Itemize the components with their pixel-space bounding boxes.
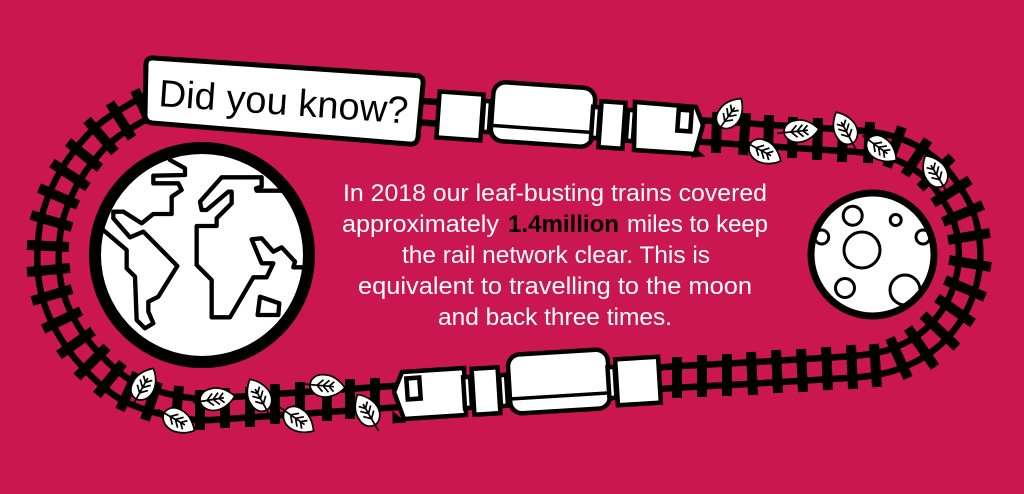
leaves on bottom track [123,363,388,440]
body text [342,180,768,331]
top train connector one [482,101,491,132]
bottom train connector one [463,377,472,408]
train: bottom [393,349,661,423]
bottom train middle carriage [507,349,611,414]
train: top [436,82,704,157]
leaves on top track [708,92,956,197]
icon: globe [95,148,309,362]
top train connector two [591,107,600,138]
bottom train connector two [499,375,508,406]
highlighted figure: 1.4million [508,211,619,238]
body text: and back three times. [438,304,672,331]
body text: In 2018 our leaf-busting trains covered [343,180,767,207]
top train rear car [436,92,484,140]
top train engine [634,102,704,157]
bottom train small car [472,367,500,415]
railway track loop [27,90,991,430]
body text: equivalent to travelling to the moon [358,273,752,300]
top train middle carriage [490,82,596,147]
top train connector three [626,110,635,141]
icon: moon [811,193,934,316]
body text: approximately [342,211,499,238]
bottom train engine [393,368,466,423]
top train small car [598,101,626,149]
body text: the rail network clear. This is [402,242,710,269]
bottom train rear car [615,357,661,405]
infographic canvas [26,56,992,434]
sign: did you know [145,58,423,144]
body text: miles to keep [627,211,768,238]
bottom train connector three [608,367,616,398]
heading: Did you know? [157,73,410,132]
